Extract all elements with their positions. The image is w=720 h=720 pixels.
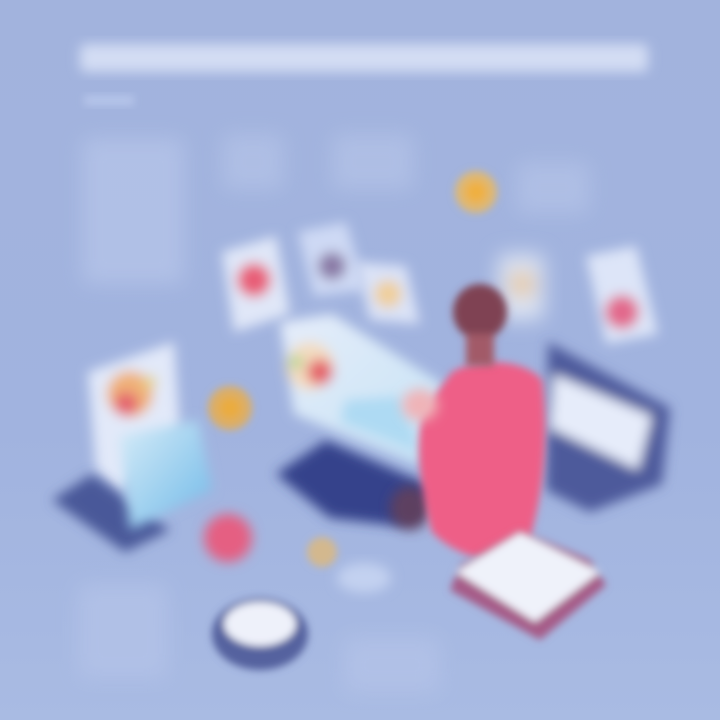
- icon: gold coin top: [455, 171, 497, 213]
- subheading: [84, 95, 134, 106]
- laptop: [546, 342, 670, 512]
- card: multicolour: [498, 254, 544, 320]
- person: [390, 284, 545, 560]
- person: pink body: [419, 362, 545, 560]
- small white shape: [337, 563, 391, 593]
- title: [80, 44, 648, 72]
- book: [450, 530, 606, 640]
- platform: navy base under screen: [276, 440, 440, 526]
- card: top centre: [298, 222, 366, 296]
- main screen: [280, 314, 444, 466]
- text block: upper second: [222, 134, 284, 190]
- person: legs shadow: [390, 486, 430, 530]
- card: right with pink circle: [586, 246, 658, 344]
- text block: bottom left: [78, 584, 168, 678]
- icon: pink circle: [204, 514, 252, 562]
- text block: upper third: [332, 134, 414, 190]
- left card: [88, 342, 180, 492]
- bowl: [212, 598, 308, 670]
- text block: upper left: [82, 138, 184, 284]
- icon: small gold coin: [307, 537, 337, 567]
- text block: upper right: [516, 162, 590, 214]
- icon: gold coin left: [208, 386, 252, 430]
- person: arm highlight: [402, 389, 438, 421]
- person: hair: [453, 284, 507, 366]
- left base: [52, 474, 170, 552]
- text block: bottom centre: [344, 638, 440, 692]
- left blue box: [120, 420, 212, 530]
- card: pink chart: [222, 236, 290, 332]
- card: yellow chart: [356, 262, 420, 324]
